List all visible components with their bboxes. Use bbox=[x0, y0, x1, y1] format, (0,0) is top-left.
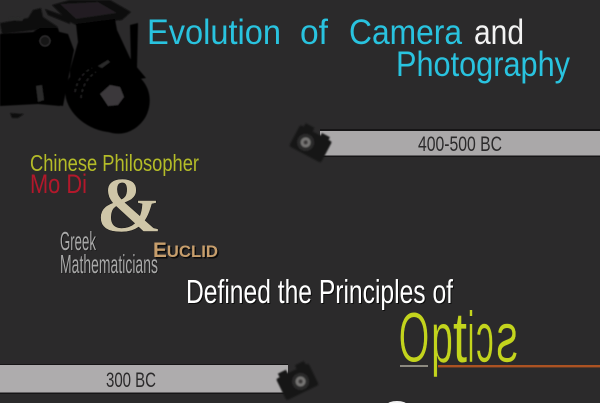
timeline bar: 300 BC: 300 BC bbox=[106, 369, 156, 392]
text: Optics: O bbox=[398, 299, 430, 378]
text: Optics bbox=[398, 299, 518, 378]
ampersand: & bbox=[96, 161, 162, 248]
title: Photography bbox=[396, 45, 570, 84]
icon: small camera 400-500 BC bbox=[289, 121, 334, 163]
timeline bar: 300 BC bbox=[0, 364, 288, 394]
title: Evolution bbox=[147, 13, 281, 52]
title: and bbox=[474, 13, 524, 52]
text: Optics: c bbox=[476, 299, 494, 378]
text: Defined the Principles of: Defined the Principles of bbox=[187, 274, 455, 311]
timeline bar: 400-500 BC: 400-500 BC bbox=[418, 133, 502, 156]
text: Euclid: EUCLID bbox=[153, 239, 218, 262]
text: Defined the Principles of: Defined the Principles of bbox=[186, 273, 454, 310]
text: Optics: p bbox=[431, 299, 453, 378]
text: Greek Mathematicians: Mathematicians bbox=[60, 249, 158, 279]
text: Greek Mathematicians bbox=[60, 226, 159, 280]
icon: large camera silhouette bbox=[0, 0, 159, 145]
title bbox=[147, 13, 570, 84]
icon: small camera 300 BC bbox=[274, 360, 319, 401]
text: Greek Mathematicians: Greek bbox=[60, 226, 97, 256]
text: Chinese Philosopher: Chinese Philosopher bbox=[30, 150, 199, 176]
divider line under Optics bbox=[400, 365, 600, 367]
title: of bbox=[300, 13, 328, 52]
timeline bar: 400-500 BC bbox=[320, 129, 600, 157]
text: Mo Di: Mo Di bbox=[30, 169, 87, 199]
text: Optics: s bbox=[496, 299, 518, 378]
text: Greek Mathematicians: Greek bbox=[61, 227, 97, 257]
white arc at bottom edge bbox=[387, 401, 407, 403]
text: Optics: i bbox=[468, 299, 474, 378]
text: Greek Mathematicians: Mathematicians bbox=[61, 250, 159, 280]
text: Euclid: EUCLID bbox=[154, 240, 220, 264]
text: Optics: t bbox=[453, 299, 467, 378]
title: Camera bbox=[349, 13, 462, 52]
